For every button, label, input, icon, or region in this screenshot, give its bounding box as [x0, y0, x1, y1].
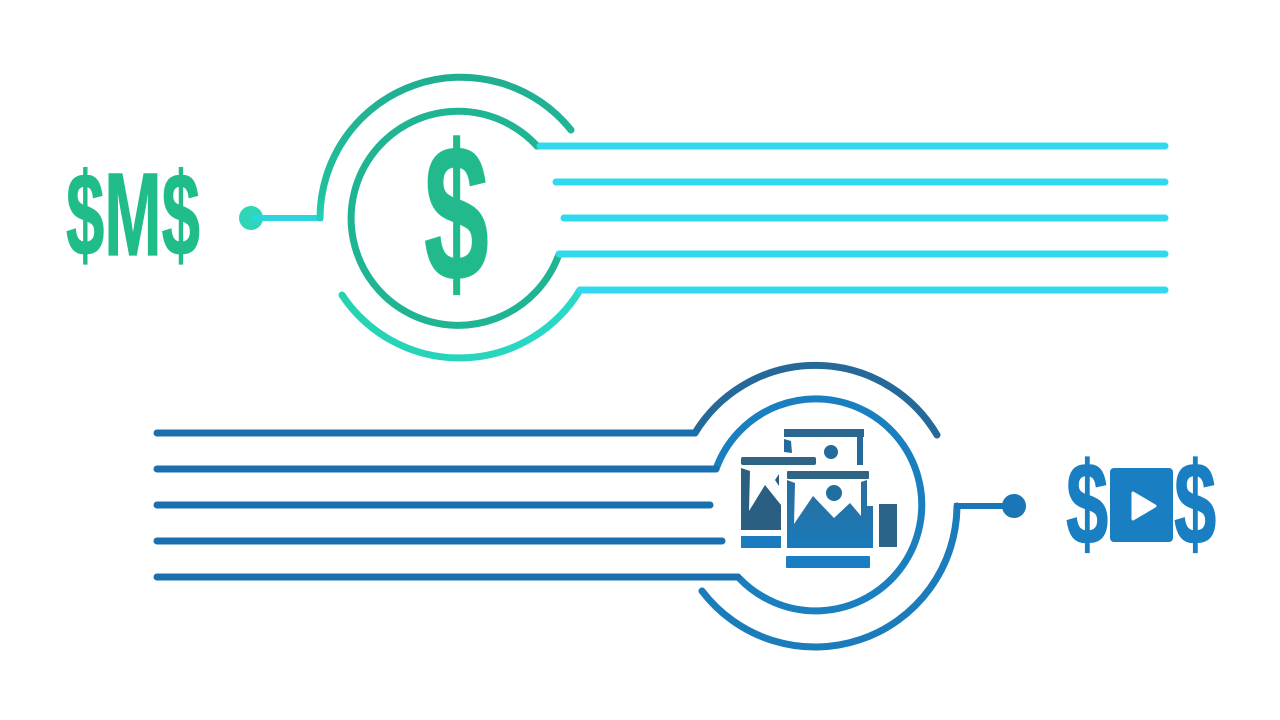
connector dot: top: [239, 206, 323, 230]
bottom inner ring: [716, 399, 922, 611]
bottom lower arc: [702, 506, 957, 647]
play triangle: [1133, 493, 1155, 519]
bottom blue lines: [157, 433, 738, 577]
top lower arc: [342, 290, 580, 358]
label: dollar video dollar: [1066, 438, 1216, 569]
top cyan lines: [540, 146, 1165, 290]
bottom outer arc: [695, 365, 937, 435]
dollar left: $: [1066, 438, 1108, 569]
front picture: [786, 471, 897, 568]
icon: stacked pictures: [741, 429, 897, 568]
middle picture: [741, 457, 816, 548]
top inner ring: [351, 111, 559, 325]
top outer arc: [320, 77, 571, 218]
video square: [1110, 468, 1173, 542]
back picture: [784, 429, 864, 465]
dollar right: $: [1174, 438, 1216, 569]
label: $M$: $M$: [66, 149, 200, 281]
icon: dollar sign: $: [424, 104, 489, 321]
connector dot: bottom: [954, 494, 1026, 518]
